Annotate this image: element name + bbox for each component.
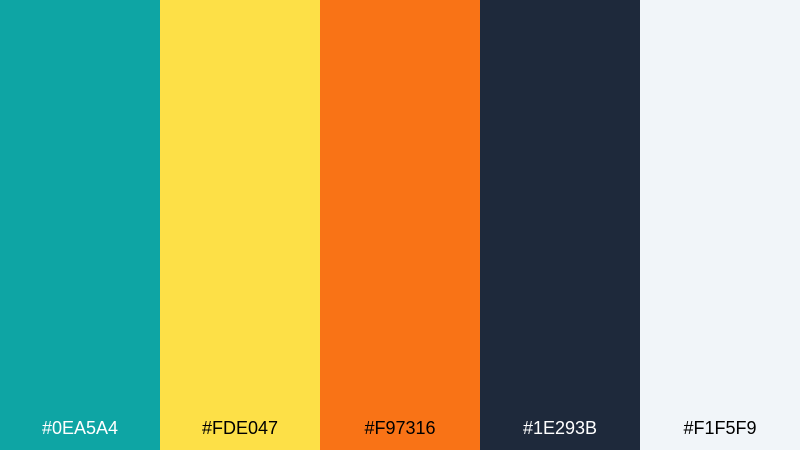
label: navy hex: #1E293B [523,418,597,438]
swatch: orange [320,0,480,450]
swatch: navy [480,0,640,450]
label: light hex: #F1F5F9 [683,418,757,438]
label: yellow hex: #FDE047 [202,418,278,438]
swatch: yellow [160,0,320,450]
label: orange hex: #F97316 [364,418,436,438]
swatch: teal [0,0,160,450]
label: teal hex: #0EA5A4 [42,418,118,438]
swatch: light [640,0,800,450]
